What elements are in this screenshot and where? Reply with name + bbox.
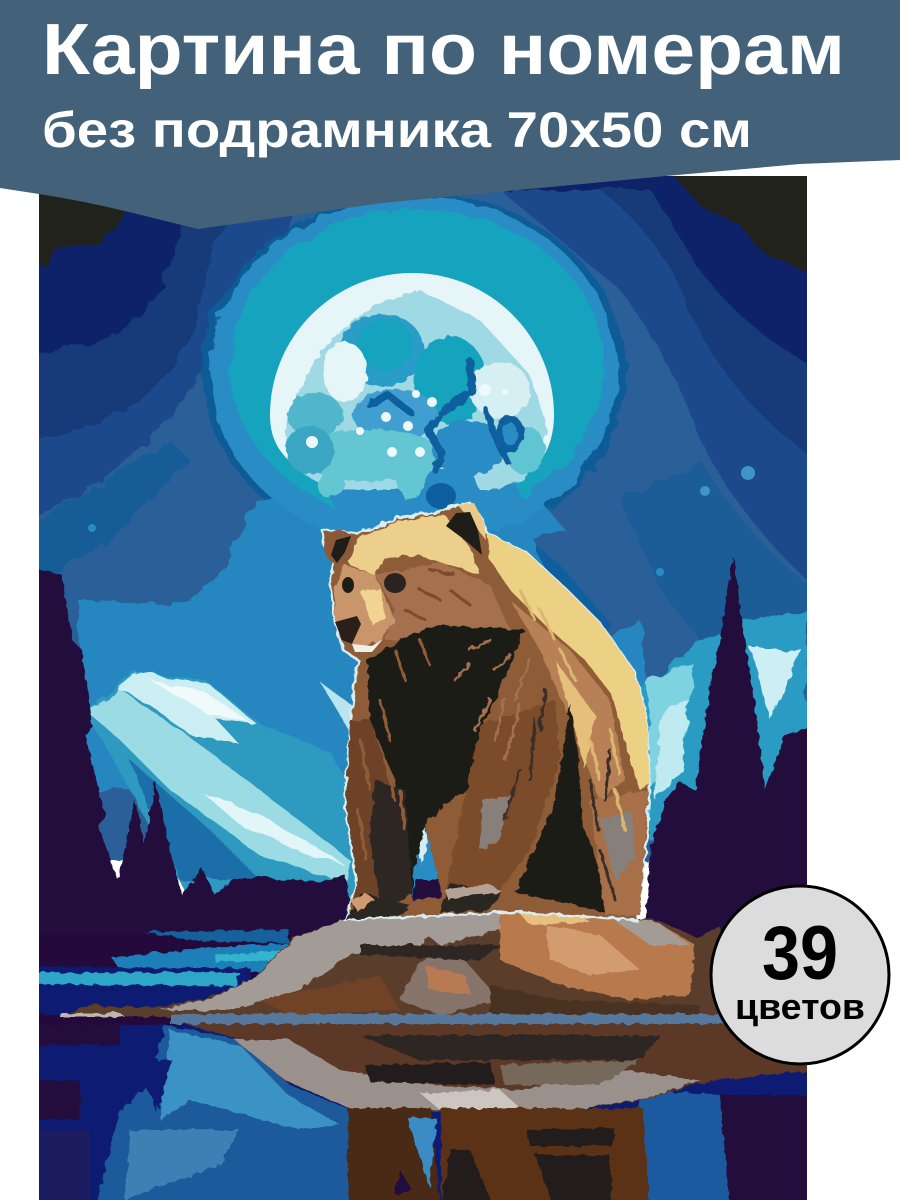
night sky [20,160,830,860]
water highlights [20,930,830,1200]
moon bright spots [306,384,508,457]
moon halo [78,192,660,790]
rock reflection [176,1022,830,1200]
stars [88,466,755,576]
title: Картина по номерам [42,10,845,90]
dark forest and far shore [39,556,807,935]
badge label: цветов [735,986,865,1027]
bear fur strokes [358,570,625,900]
mountains [85,610,807,900]
bear face [335,573,406,652]
bear colour zones [335,515,650,915]
bear paws [345,883,503,920]
dark corners [39,176,807,272]
painting: bear under the moon [20,160,830,1200]
moon craters and channels [370,362,521,470]
bear silhouette with pale outline [322,503,650,920]
subtitle: без подрамника 70х50 см [42,102,752,158]
bear [322,503,650,920]
moon [270,273,554,500]
bear ears [324,503,486,564]
rock [60,912,724,1026]
banner [0,0,900,229]
sea [39,943,260,1026]
dark patches right of bear [533,530,640,636]
dark lunar patch [426,483,456,509]
badge number: 39 [762,911,838,996]
badge: 39 colours [711,886,889,1064]
